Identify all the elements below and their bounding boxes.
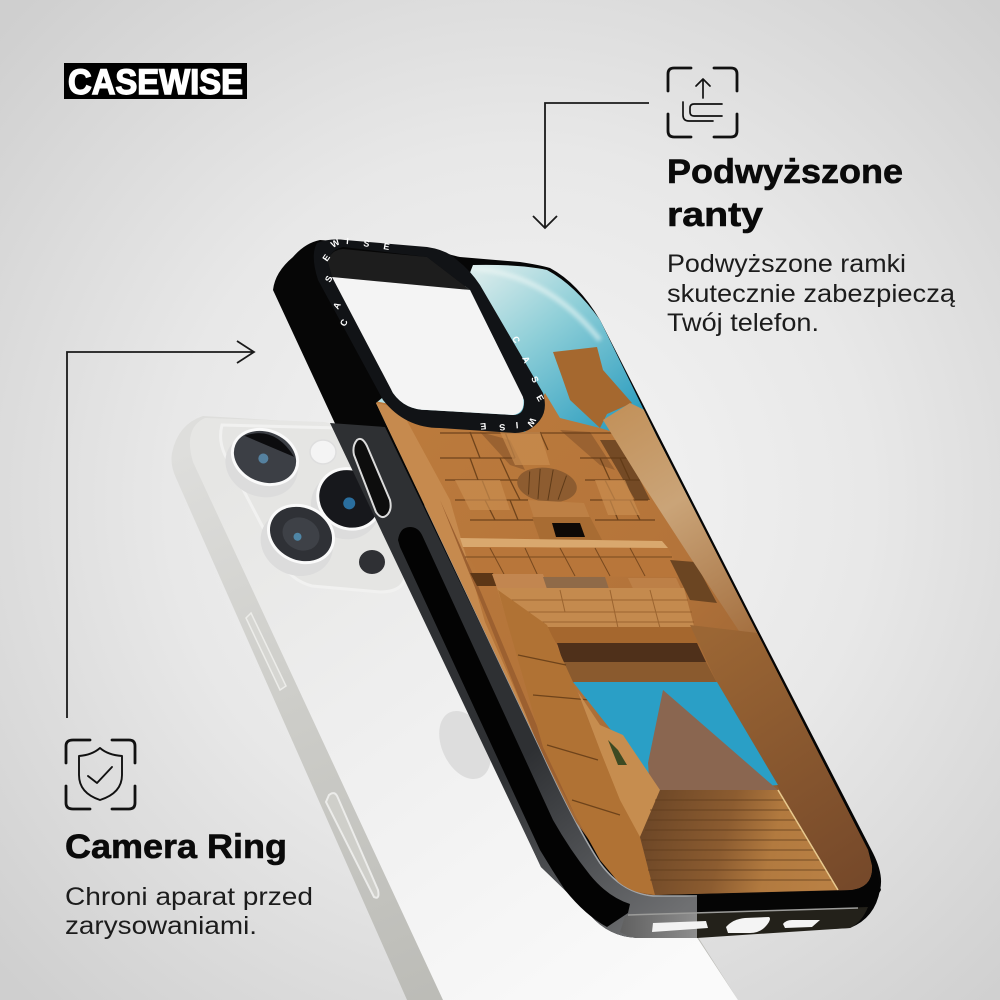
case artwork — [376, 264, 872, 895]
text: raised edges description: Twój telefon. — [667, 309, 819, 337]
heading: raised edges — [667, 153, 903, 234]
apple logo — [429, 703, 501, 787]
text: camera ring description — [65, 883, 313, 940]
lintel underside — [547, 627, 700, 645]
right ledge block — [628, 578, 680, 588]
ring text: I — [515, 420, 519, 430]
heading: raised edges: Podwyższone — [667, 153, 903, 191]
jamb cracks — [518, 655, 620, 815]
text: raised edges description: Podwyższone ramki — [667, 250, 906, 278]
frame seams — [505, 590, 694, 628]
upper inner wall — [328, 249, 470, 290]
ring text: S — [363, 238, 370, 249]
capital shade blocks — [480, 430, 615, 470]
shell niche — [517, 468, 577, 502]
lidar sensor — [359, 550, 385, 574]
text: camera ring description: Chroni aparat przed — [65, 883, 313, 911]
window frame — [532, 517, 602, 540]
lintel lower — [563, 662, 717, 683]
ring text: S — [323, 274, 335, 284]
ring text: A — [520, 355, 532, 365]
stair lines — [642, 800, 833, 880]
stairs — [640, 790, 838, 895]
volume button pill — [353, 439, 391, 517]
text: raised edges description: skutecznie zabezpieczą — [667, 280, 955, 308]
lower side band — [330, 423, 697, 938]
below niche block — [528, 500, 590, 518]
lens bottom — [250, 492, 347, 588]
wall block lines — [440, 432, 655, 520]
speaker hole right — [783, 920, 820, 928]
speaker hole left — [652, 921, 708, 932]
lens right — [299, 455, 395, 552]
stone wall — [376, 393, 872, 895]
ring text: E — [320, 252, 332, 263]
left jamb — [498, 590, 655, 895]
right dark gap — [670, 560, 717, 603]
white phone — [172, 416, 738, 1000]
lit stair edge — [778, 790, 838, 890]
camera plateau — [221, 425, 405, 592]
ring text: I — [346, 236, 349, 246]
ring body — [314, 239, 545, 433]
ring text: A — [331, 300, 343, 311]
upper dark gap — [600, 440, 650, 500]
ring text: S — [499, 422, 506, 432]
camera ring — [314, 236, 546, 433]
rim highlight — [425, 505, 697, 896]
phone back face — [190, 418, 738, 1000]
ledge seams — [465, 548, 672, 576]
ledge light stripe — [460, 538, 668, 548]
phone side band — [172, 416, 738, 1000]
ring text: E — [383, 241, 390, 252]
pyramid — [648, 690, 778, 790]
charging port — [726, 917, 770, 933]
black side stripe — [398, 527, 630, 927]
ledge band — [463, 547, 644, 548]
side wall — [578, 692, 660, 837]
side button lower — [326, 793, 378, 898]
door sky — [573, 682, 778, 792]
bottom foot right — [697, 907, 868, 938]
sky — [376, 264, 700, 520]
column — [603, 403, 766, 650]
bottom light line — [628, 908, 858, 915]
bottom foot left — [620, 913, 697, 938]
ring text: E — [534, 393, 546, 403]
bush — [608, 740, 627, 765]
light block tints — [455, 432, 640, 515]
dark ledge block — [470, 573, 497, 586]
heading: raised edges: ranty — [667, 196, 763, 234]
flash — [310, 440, 336, 464]
ring text: S — [529, 375, 541, 384]
column capital — [553, 347, 632, 428]
ring text: W — [525, 416, 538, 429]
ring text: C — [510, 335, 522, 345]
planet arc — [468, 268, 600, 340]
speckled ledge block — [543, 577, 608, 588]
pillar shadow bricks — [440, 500, 575, 815]
black case — [273, 240, 881, 938]
arrow: left — [67, 341, 254, 718]
icon: raised edges — [668, 68, 737, 137]
heading: camera ring: Camera Ring — [65, 828, 287, 866]
case body — [273, 240, 881, 938]
bottom rim black — [697, 868, 881, 912]
window opening — [552, 523, 585, 537]
ring text — [320, 236, 546, 432]
lens opening — [332, 277, 524, 415]
icon: shield — [66, 740, 135, 809]
right jamb — [690, 625, 872, 890]
ring text: W — [329, 237, 342, 250]
left pillar — [376, 403, 535, 735]
light ledge block — [492, 574, 548, 588]
lintel dark stripe — [557, 643, 706, 662]
logo: CASEWISE — [68, 63, 243, 102]
ring text: C — [338, 317, 350, 328]
text: raised edges description — [667, 250, 955, 337]
ring text: E — [480, 421, 487, 431]
side button upper — [246, 613, 286, 690]
arrow: top — [533, 103, 649, 228]
text: camera ring description: zarysowaniami. — [65, 912, 257, 940]
door frame head — [497, 588, 695, 630]
lens top — [216, 417, 310, 508]
